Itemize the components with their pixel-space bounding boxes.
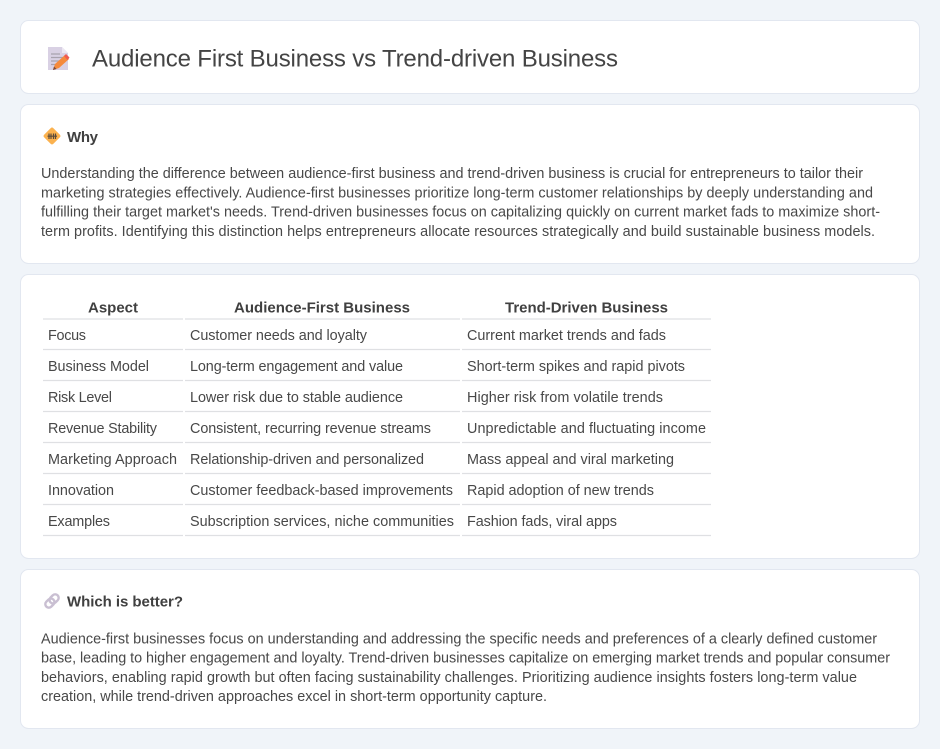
table header row: [43, 300, 711, 319]
table row: risk level: [43, 390, 711, 412]
table row: risk level: Risk Level: [48, 390, 112, 406]
table header row: Aspect: [88, 300, 138, 316]
text block: why paragraph: fulfilling their target market's needs. Trend-driven businesses focus on capitalizing quickly on current market fads to maximize short-: [41, 204, 880, 220]
heading: page title: Audience First Business vs Trend-driven Business: [92, 46, 618, 72]
table row: focus: [43, 328, 711, 350]
text block: why paragraph: [41, 166, 880, 240]
table header row: Audience-First Business: [234, 300, 410, 316]
table row: examples: Fashion fads, viral apps: [467, 514, 617, 530]
table row: focus: Focus: [48, 328, 86, 344]
table row: revenue stability: Unpredictable and fluctuating income: [467, 421, 706, 437]
heading: why: Why: [67, 129, 99, 146]
table row: marketing approach: Mass appeal and viral marketing: [467, 452, 674, 468]
table row: risk level: Higher risk from volatile trends: [467, 390, 663, 406]
table row: business model: Long-term engagement and value: [190, 359, 403, 375]
text block: why paragraph: marketing strategies effectively. Audience-first businesses prioritize long-term customer relationships by deeply understanding and: [41, 186, 873, 202]
table row: examples: [43, 514, 711, 536]
table row: business model: [43, 359, 711, 380]
panel: comparison table: [20, 274, 920, 558]
table row: innovation: [43, 483, 711, 504]
table row: revenue stability: [43, 421, 711, 442]
table row: revenue stability: Consistent, recurring revenue streams: [190, 421, 431, 437]
table row: innovation: Rapid adoption of new trends: [467, 483, 654, 499]
panel: title: [20, 20, 920, 94]
text block: which is better paragraph: creation, while trend-driven approaches excel in short-term opportunity capture.: [41, 689, 547, 705]
text block: which is better paragraph: base, leading to higher engagement and loyalty. Trend-driven businesses capitalize on emerging market trends and popular consumer: [41, 650, 890, 666]
text block: why paragraph: Understanding the difference between audience-first business and trend-driven business is crucial for entrepreneurs to tailor their: [41, 166, 863, 182]
table row: examples: Examples: [48, 514, 110, 530]
table row: focus: Current market trends and fads: [467, 328, 666, 344]
icon: chain link: [44, 593, 60, 609]
text block: which is better paragraph: Audience-first businesses focus on understanding and addressing the specific needs and preferences of a clearly defined customer: [41, 632, 877, 648]
table row: innovation: Innovation: [48, 483, 114, 499]
text block: why paragraph: term profits. Identifying this distinction helps entrepreneurs allocate resources strategically and build sustainable business models.: [41, 224, 875, 240]
table row: examples: Subscription services, niche communities: [190, 514, 454, 530]
table row: revenue stability: Revenue Stability: [48, 421, 158, 437]
icon: memo with pencil: [48, 47, 70, 70]
text block: which is better paragraph: behaviors, enabling rapid growth but often facing sustainability challenges. Prioritizing audience insights fosters long-term value: [41, 670, 857, 686]
table row: focus: Customer needs and loyalty: [190, 328, 368, 344]
table row: marketing approach: Relationship-driven and personalized: [190, 452, 424, 468]
table row: marketing approach: [43, 452, 711, 474]
table header row: Trend-Driven Business: [505, 300, 668, 316]
heading: which is better: Which is better?: [67, 594, 183, 610]
panel: which is better: [20, 570, 920, 728]
table row: risk level: Lower risk due to stable audience: [190, 390, 403, 406]
text block: which is better paragraph: [41, 632, 890, 705]
icon: diamond sign: [43, 127, 61, 145]
panel: why: [20, 104, 920, 264]
table row: innovation: Customer feedback-based improvements: [190, 483, 453, 499]
table row: business model: Short-term spikes and rapid pivots: [467, 359, 685, 375]
table row: marketing approach: Marketing Approach: [48, 452, 177, 468]
table row: business model: Business Model: [48, 359, 149, 375]
